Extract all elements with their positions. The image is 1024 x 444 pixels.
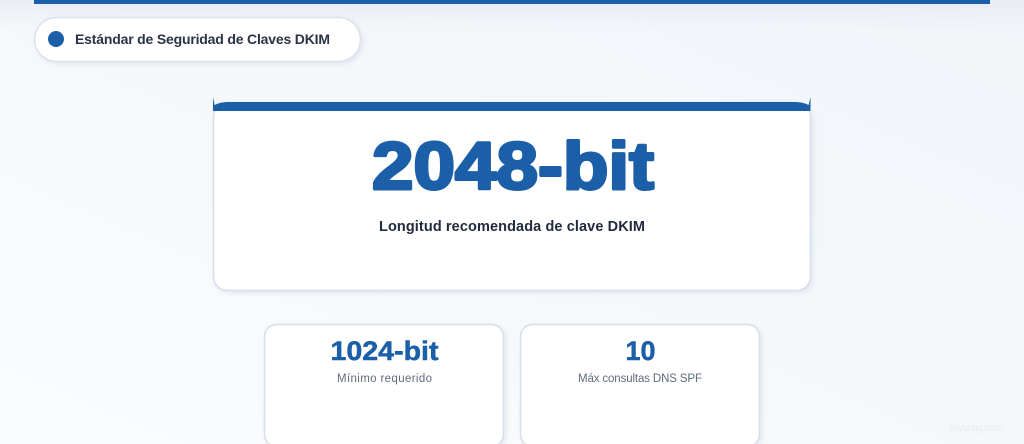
- watermark: skysnag.com: [949, 423, 1003, 434]
- value: 10: 10: [626, 336, 656, 366]
- panel: minimum required: [264, 324, 504, 444]
- panel: max SPF DNS lookups: [520, 324, 760, 444]
- panel: main metric card: [213, 97, 810, 290]
- icon: status dot: [48, 31, 64, 47]
- main number: 2048-bit: 2048-bit: [372, 129, 654, 204]
- value: 1024-bit: 1024-bit: [330, 336, 439, 366]
- label: Máx consultas DNS SPF: Máx consultas DNS SPF: [578, 373, 702, 385]
- header pill: Estándar de Seguridad de Claves DKIM: [34, 18, 360, 62]
- label: Mínimo requerido: Mínimo requerido: [337, 373, 432, 385]
- main number caption: Longitud recomendada de clave DKIM: [379, 219, 645, 235]
- pill heading: Estándar de Seguridad de Claves DKIM: [75, 31, 330, 47]
- card top accent bar: [213, 97, 810, 111]
- top accent bar: [34, 0, 990, 4]
